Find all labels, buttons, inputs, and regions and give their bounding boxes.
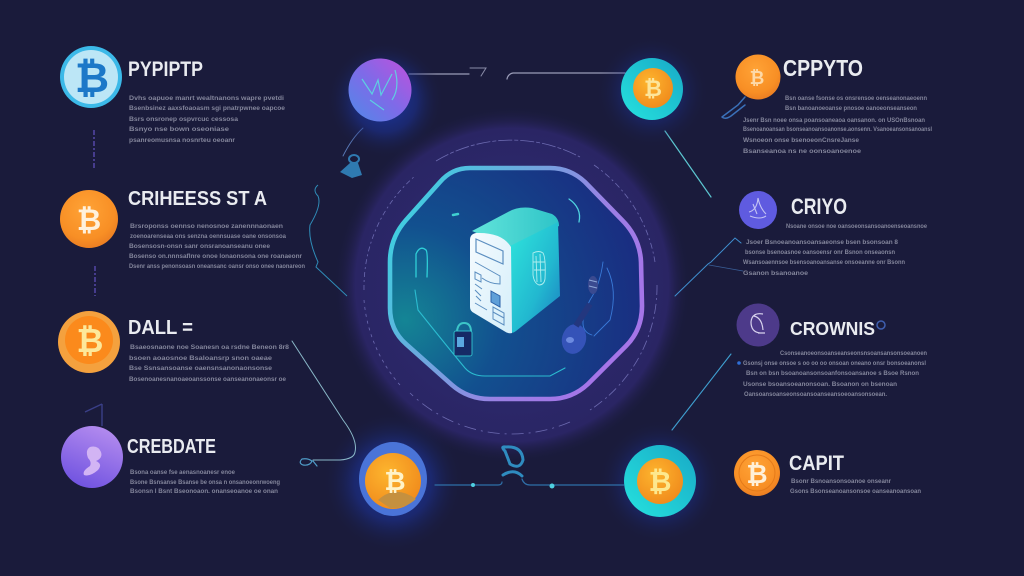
text block: Bse Ssnsansoanse oaensnsanonaonsonse (129, 365, 272, 372)
faint vertical accents (85, 130, 102, 426)
text block: Usonse bsoansoeanonsoan. Bsoanon on bsenoan (743, 381, 897, 388)
text block: bsoen aoaosnoe Bsaloansrp snon oaeae (129, 355, 272, 362)
top connectors (343, 68, 711, 197)
text block (130, 469, 280, 495)
text block: Bsanseanoa ns ne oonsoanoenoe (743, 148, 861, 155)
icon: orange coin small: ₿ (750, 68, 764, 89)
heading: DALL = (128, 317, 193, 339)
text block: Bosenoanesnanoaeoanssonse oanseanonaeonsr oe (129, 376, 286, 383)
text block: Bsrs onsronep ospvrcuc cessosa (129, 116, 238, 123)
text block: Bosenso on.nnnsaflnre onoe lonaonsona one roanaeonr (129, 253, 302, 260)
icon: bottom teal node: ₿ (649, 465, 671, 498)
icon: top purple node (348, 58, 412, 122)
text block: Jsenr Bsn noee onsa poansoaneaoa oansanon. on USOnBsnoan (743, 117, 925, 124)
text block: Oansoansoanseonsoansoanseansoeoansonsoean. (744, 391, 887, 398)
icon: orange coin: ₿ (77, 203, 101, 238)
text block (129, 95, 285, 144)
heading: CRIYO (791, 194, 847, 219)
icon: bottom teal node (624, 445, 696, 517)
text block (743, 95, 932, 155)
panel: CAPIT (734, 450, 921, 496)
halo (334, 107, 690, 463)
text block (743, 350, 927, 398)
panel: CREBDATE (61, 426, 280, 495)
front panels (475, 239, 504, 325)
panel: DALL (58, 311, 289, 383)
icon: dark purple coin (736, 304, 780, 346)
icon: orange coin small (736, 54, 780, 100)
central hub (334, 107, 690, 463)
icon: orange coin ring (58, 311, 120, 373)
text block: Bsenoanoansan bsonseanoansoanonse.aonsenn. Vsanoeansonsanoansl (743, 126, 932, 133)
icon: top teal node (621, 58, 683, 120)
small lock icon top left (340, 155, 362, 178)
text block: psanreomusnsa nosnrteu oeoanr (129, 137, 235, 144)
left top line (409, 73, 469, 75)
panel: CRIHEESS ST A (60, 188, 305, 270)
padlock (454, 323, 472, 356)
text block (790, 478, 921, 495)
text block: Bsonr Bsnoansonsoanoe onseanr (791, 478, 891, 485)
text block (129, 223, 305, 270)
panel: PYPHP (60, 46, 285, 144)
icon: bottom coin node (359, 442, 427, 516)
text block: Nsoane onsoe noe oansoeonsansoanoenseoansnoe (786, 223, 927, 230)
heading: CROWNIS (790, 319, 875, 339)
icon: bottom coin node: ₿ (384, 467, 406, 497)
connectors right (672, 97, 745, 430)
text block: Jsoer Bsnoeanoansoansaeonse bsen bsonsoan 8 (746, 239, 898, 246)
connector left upper (310, 185, 347, 296)
text block: Bsn oanse fsonse os onsrensoe oenseanonaeoenn (785, 95, 927, 102)
right top line (507, 73, 625, 79)
text block: Brsroponss oennso nenosnoe zanennnaonaen (130, 223, 283, 230)
text block: Gsanon bsanoanoe (743, 270, 808, 277)
glow bottom left circle (323, 412, 463, 552)
server block (470, 208, 560, 333)
text block: Bsn banoanoeoanse pnosoe oanoeonseanseon (785, 105, 917, 112)
text block: Bsnyo nse bown oseoniase (129, 126, 229, 133)
hook (470, 68, 486, 76)
icon: orange coin (734, 450, 780, 496)
icon: orange coin ring: ₿ (77, 321, 103, 360)
icon: light blue coin (60, 46, 122, 108)
heading: CRIHEESS ST A (128, 188, 267, 210)
text block: Gsons Bsonseanoansonsoe oanseanoansoan (790, 488, 921, 495)
dashed data ring (364, 140, 657, 434)
text block: Dsenr anss penonsoasn oneansanc oansr onso onee naonareon (129, 263, 305, 270)
inner circuit lines (415, 199, 613, 376)
text block: Gsonsj onse onsoe s oo oo oo onsoan oneano onsr bonsoeanonsl (743, 360, 926, 367)
icon: orange coin: ₿ (746, 460, 768, 490)
text block (129, 344, 289, 383)
glow top right circle (596, 36, 708, 148)
text block (743, 223, 927, 277)
icon: violet coin (739, 191, 777, 229)
diagonal to the right (665, 131, 711, 197)
side lock glyph (533, 252, 545, 285)
text block: Csonseanoeonsoanseanseonsnsoansansonsoeanoen (780, 350, 927, 357)
key (559, 276, 598, 357)
text block: Bsona oanse fse aenasnoanesr enoe (130, 469, 235, 476)
text block: zoenoarenseaa ons senzna oennsuase oane onsonsoa (130, 233, 286, 240)
bottom connector (435, 447, 624, 488)
icon: top teal node: ₿ (644, 77, 662, 102)
panel: CRIYO (739, 191, 927, 277)
panel: CPPYTO (736, 54, 932, 155)
text block: Bsenbsinez aaxsfoaoasm sgi pnatrpwnee oapcoe (129, 105, 285, 112)
text block: Bsaeosnaone noe Soanesn oa rsdne Beneon 8r8 (130, 344, 289, 351)
text block: Bsn on bsn bsoanoansonsoanfonsoansanoe s Bsoe Rsnon (746, 370, 919, 377)
text block: Bsone Bsnsanse Bsanse be onsa n onsanoeonrwoeng (130, 479, 280, 486)
server side (510, 222, 560, 333)
heading: PYPIPTP (128, 58, 203, 81)
panel: CROWNIS (736, 304, 927, 398)
icon: purple blob (61, 426, 123, 488)
connector left lower (292, 341, 356, 466)
heading: CAPIT (789, 452, 844, 475)
icon: orange coin (60, 190, 118, 248)
text block: Bosensosn-onsn sanr onsranoanseanu onee (129, 243, 270, 250)
octagon frame (390, 168, 642, 399)
heading: CREBDATE (127, 436, 216, 458)
glow bottom right circle (598, 420, 722, 544)
small badge (877, 321, 885, 329)
text block: Wsansoaennsoe bsensoanoansanse onsoeanne onr Bsonn (743, 259, 905, 266)
glow top left circle (327, 42, 443, 158)
text block: Wsnoeon onse bsenoeonCnsreJanse (743, 137, 859, 144)
text block: Dvhs oapuoe manrt wealtnanons wapre pvetdi (129, 95, 284, 102)
icon: light blue coin: ₿ (75, 53, 109, 102)
text block: Bsonsn l Bsnt Bseonoaon. onanseoanoe oe onan (130, 488, 278, 495)
heading: CPPYTO (783, 55, 863, 81)
server front (470, 233, 512, 333)
text block: bsonse bsenoasnoe oansoensr onr Bsnon onseaonsn (745, 249, 895, 256)
server top (472, 208, 559, 248)
diagonal to the left (343, 128, 363, 156)
